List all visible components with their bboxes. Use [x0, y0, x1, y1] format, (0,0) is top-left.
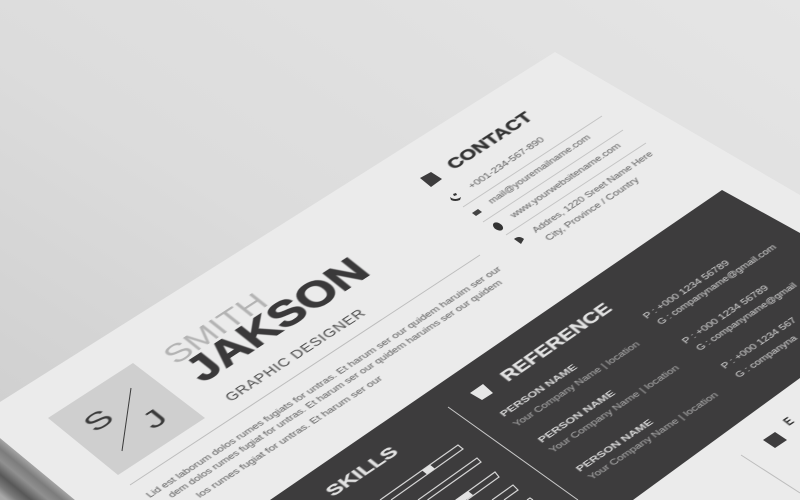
job title: GRAPHIC DESIGNER — [222, 307, 369, 404]
phone and email details: P : +000 1234 56789 — [641, 259, 732, 321]
reference names — [498, 363, 656, 474]
reference companies: Your Company Name | location — [547, 364, 682, 455]
contact details: mail@youremailname.com — [486, 133, 593, 206]
skill bar fills — [422, 465, 473, 500]
phone and email details: G : companyname@gmail.com — [655, 243, 779, 327]
name: Jakson: JAKSON — [174, 251, 379, 389]
reference companies: Your Company Name | location — [586, 391, 721, 482]
skills heading: SKILLS — [321, 443, 402, 499]
profile text block: los rumes fugiat for untras. Et harum ser our — [194, 374, 386, 500]
icon: mail — [472, 209, 482, 216]
phone and email details: P : +000 1234 56789 — [680, 284, 771, 346]
contact details: City, Province / Country — [543, 176, 642, 243]
icon: location pin — [514, 237, 524, 244]
next section square bullet — [763, 432, 787, 448]
skills section — [321, 443, 533, 500]
phone and email details — [641, 243, 800, 380]
contact details — [466, 133, 656, 243]
reference companies: Your Company Name | location — [511, 340, 643, 429]
icon: phone — [450, 193, 461, 201]
phone and email details: P : +000 1234 567 — [719, 316, 799, 371]
contact details: Addres, 1220 Sreet Name Here — [530, 150, 656, 235]
reference companies — [511, 340, 721, 482]
panel divider — [448, 407, 578, 500]
contact details: +001-234-567-890 — [466, 135, 548, 191]
paper stack side — [0, 438, 75, 500]
icon: mouse — [491, 221, 505, 232]
skill bars — [380, 445, 533, 500]
dark panel — [270, 190, 800, 500]
contact section — [420, 109, 656, 244]
phone and email details: G : companyname@gmail — [694, 281, 800, 353]
logo monogram: S — [77, 405, 121, 437]
next section heading: E — [780, 415, 797, 428]
reference names: PERSON NAME — [498, 363, 580, 419]
contact heading: CONTACT — [442, 109, 537, 172]
name: Smith: SMITH — [157, 289, 275, 369]
reference square bullet — [470, 384, 493, 400]
logo monogram: J — [135, 404, 175, 434]
logo monogram — [48, 363, 205, 475]
contact details: www.yourwebsitename.com — [507, 142, 624, 220]
reference names: PERSON NAME — [536, 389, 618, 445]
contact square bullet — [420, 172, 442, 187]
reference section — [470, 243, 800, 482]
reference names: PERSON NAME — [574, 418, 656, 474]
profile text block: Lid est laborum dolos rumes fugiats for untras. Et harum ser our quidem haruim ser our — [144, 265, 505, 500]
phone and email details: G : companyna — [733, 334, 800, 380]
reference heading: REFERENCE — [496, 300, 617, 385]
profile text block: dem dolos rumes fugiat for untras. Et harum ser our quidem haruims ser our quidem — [166, 279, 505, 500]
